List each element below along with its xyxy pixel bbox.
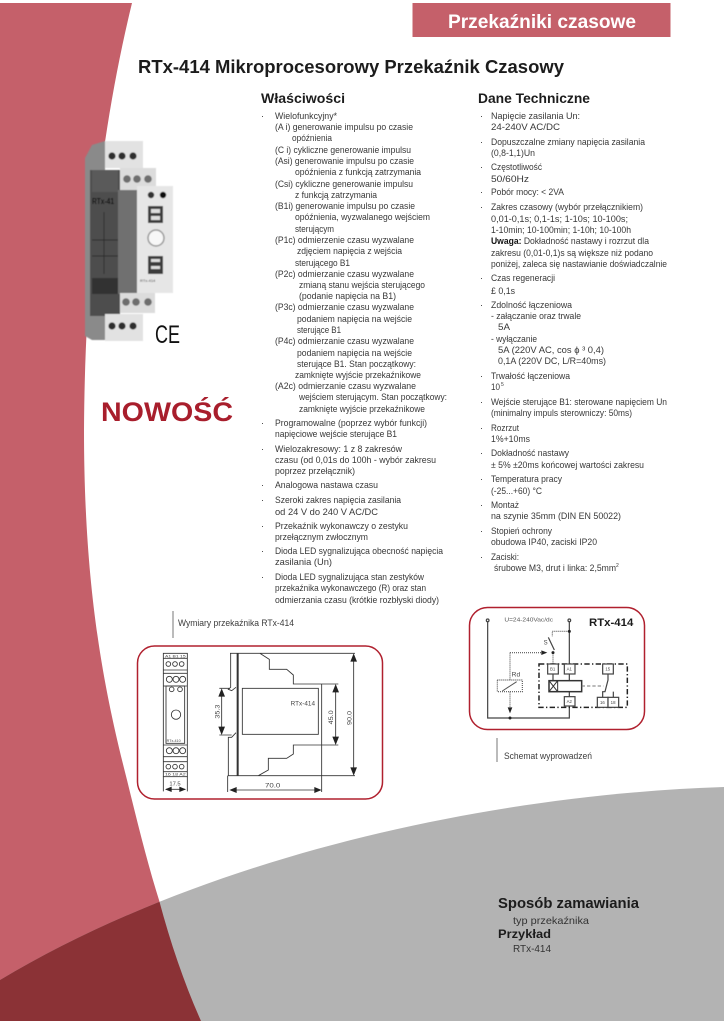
item: szeroki zakres: od 24 V do 240 V AC/DC <box>275 506 378 517</box>
spec: rozrzut: 1%+10ms <box>491 433 530 444</box>
item: wielozakresowy: czasu (od 0,01s do 100h - wybór zakresu <box>275 454 436 465</box>
item: analogowa nastawa: · <box>261 479 264 490</box>
spec: zdolność łączeniowa: 5A (220V AC, cos ϕ ³ 0,4) <box>498 344 604 355</box>
item: analogowa nastawa: Analogowa nastawa czasu <box>275 479 378 490</box>
spec: dokładność nastawy: ± 5% ±20ms końcowej wartości zakresu <box>491 459 644 470</box>
item: wielofunkcyjny: wejściem sterującym. Stan początkowy: <box>298 391 447 402</box>
side view drawing: 35.3 <box>214 704 221 719</box>
item: wielofunkcyjny: opóźnienia, wyzwalanego wejściem <box>295 211 430 222</box>
caption: schemat: Schemat wyprowadzeń <box>504 751 592 761</box>
item: przekaźnik wykonawczy <box>261 520 408 542</box>
spec: stopień ochrony: Stopień ochrony <box>491 525 552 536</box>
item: programowalne: napięciowe wejście sterujące B1 <box>275 428 397 439</box>
spec: zakres czasowy: · <box>480 201 483 212</box>
item: wielofunkcyjny: sterujące B1 <box>297 324 341 335</box>
item: wielozakresowy: · <box>261 443 264 454</box>
item: dioda LED stanu: Dioda LED sygnalizująca stan zestyków <box>275 571 424 582</box>
schematic label: model: RTx-414 <box>589 617 633 629</box>
front view drawing: RTx-410 <box>167 739 181 743</box>
item: dioda LED stanu: · <box>261 571 264 582</box>
spec: napięcie zasilania: 24-240V AC/DC <box>491 121 560 132</box>
item: dioda LED zasilania: · <box>261 545 264 556</box>
spec: rozrzut: · <box>480 422 483 433</box>
schematic terminals: A2 <box>567 699 573 704</box>
item: wielofunkcyjny: (C i) cykliczne generowanie impulsu <box>275 144 411 155</box>
spec: wejście sterujące: · <box>480 396 483 407</box>
side view drawing <box>214 653 357 793</box>
item: szeroki zakres <box>261 494 402 517</box>
item: wielofunkcyjny: (P4c) odmierzanie czasu wyzwalane <box>275 335 414 346</box>
spec: trwałość łączeniowa: 5 <box>501 382 504 388</box>
schematic label: voltage: U=24-240Vac/dc <box>504 618 553 624</box>
spec: zakres czasowy: Uwaga: Dokładność nastawy i rozrzut dla <box>491 235 650 246</box>
spec: zmiany napięcia: (0,8-1,1)Un <box>491 147 535 158</box>
device photo: RTx-414 <box>140 278 156 283</box>
background: gray curved area <box>0 787 724 1021</box>
item: wielofunkcyjny: sterujące B1. Stan początkowy: <box>297 358 416 369</box>
spec: zaciski: 2 <box>616 563 619 569</box>
item: dioda LED stanu: odmierzania czasu (krótkie rozbłyski diody) <box>275 594 439 605</box>
spec: zakres czasowy: poniżej, zaleca się nastawianie doświadczalnie <box>491 258 667 269</box>
item: wielofunkcyjny: zdjęciem napięcia z wejścia <box>297 245 403 256</box>
item: wielofunkcyjny: z funkcją zatrzymania <box>295 189 378 200</box>
spec: pobór mocy: Pobór mocy: < 2VA <box>491 186 565 197</box>
device photo <box>85 141 173 341</box>
spec: zaciski <box>480 551 619 573</box>
spec: częstotliwość: · <box>480 161 483 172</box>
spec: częstotliwość: 50/60Hz <box>491 173 529 184</box>
caption: wymiary <box>172 611 294 638</box>
spec: temperatura pracy: Temperatura pracy <box>491 473 562 484</box>
item: wielozakresowy: Wielozakresowy: 1 z 8 zakresów <box>275 443 402 454</box>
device photo: RTx-41 <box>92 197 114 206</box>
column: Właściwości list <box>261 110 447 605</box>
item: przekaźnik wykonawczy: Przekaźnik wykonawczy o zestyku <box>275 520 408 531</box>
item: wielofunkcyjny: · <box>261 110 264 121</box>
item: wielofunkcyjny: sterującym <box>295 223 334 234</box>
item: wielofunkcyjny: (Asi) generowanie impulsu po czasie <box>275 155 414 166</box>
spec: zdolność łączeniowa: - wyłączanie <box>491 333 537 344</box>
spec: czas regeneracji: · <box>480 272 483 283</box>
item: wielofunkcyjny: Wielofunkcyjny* <box>275 110 337 121</box>
spec: zakres czasowy: Zakres czasowy (wybór przełącznikiem) <box>491 201 643 212</box>
spec: czas regeneracji: £ 0,1s <box>491 285 515 296</box>
side view drawing: 90.0 <box>346 711 353 725</box>
item: wielofunkcyjny: (P3c) odmierzanie czasu wyzwalane <box>275 301 414 312</box>
spec: zdolność łączeniowa: 0,1A (220V DC, L/R=40ms) <box>498 355 606 366</box>
spec: trwałość łączeniowa: · <box>480 370 483 381</box>
item: wielofunkcyjny: sterującego B1 <box>295 257 350 268</box>
column: Dane Techniczne list <box>480 110 667 573</box>
item: wielofunkcyjny: zamknięte wyjście przekaźnikowe <box>295 369 421 380</box>
item: wielofunkcyjny: (P2c) odmierzanie czasu wyzwalane <box>275 268 414 279</box>
ordering info block: Sposób zamawiania <box>498 896 640 912</box>
item: wielofunkcyjny <box>261 110 447 414</box>
spec: napięcie zasilania: · <box>480 110 483 121</box>
spec: zdolność łączeniowa: · <box>480 299 483 310</box>
spec: stopień ochrony: · <box>480 525 483 536</box>
spec: zdolność łączeniowa: Zdolność łączeniowa <box>491 299 573 310</box>
item: szeroki zakres: Szeroki zakres napięcia zasilania <box>275 494 402 505</box>
spec: zmiany napięcia: Dopuszczalne zmiany napięcia zasilania <box>491 136 646 147</box>
ordering info block: typ przekaźnika <box>513 915 589 927</box>
spec: częstotliwość <box>480 161 542 184</box>
spec: montaż: · <box>480 499 483 510</box>
spec: czas regeneracji <box>480 272 555 296</box>
spec: dokładność nastawy: Dokładność nastawy <box>491 447 569 458</box>
panel: wiring schematic <box>470 608 644 730</box>
header banner <box>412 3 670 37</box>
spec: zmiany napięcia: · <box>480 136 483 147</box>
item: programowalne <box>261 417 427 439</box>
front view drawing <box>163 653 187 792</box>
schematic terminals: 18 <box>611 700 616 705</box>
item: wielofunkcyjny: podaniem napięcia na wejście <box>297 347 412 358</box>
spec: trwałość łączeniowa <box>480 370 571 392</box>
spec: pobór mocy: · <box>480 186 483 197</box>
spec: temperatura pracy: · <box>480 473 483 484</box>
spec: trwałość łączeniowa: Trwałość łączeniowa <box>491 370 571 381</box>
switch label: S <box>544 641 548 647</box>
schematic wiring <box>486 619 627 719</box>
side view drawing: RTx-414 <box>291 700 315 707</box>
ordering info block: Przykład <box>498 927 551 941</box>
item: wielofunkcyjny: podaniem napięcia na wejście <box>297 313 412 324</box>
spec: trwałość łączeniowa: 10 <box>491 381 500 392</box>
spec: temperatura pracy <box>480 473 562 496</box>
spec: napięcie zasilania: Napięcie zasilania Un: <box>491 110 580 121</box>
schematic terminals: A1 <box>567 667 573 672</box>
item: wielofunkcyjny: opóźnienia z funkcją zatrzymania <box>295 166 422 177</box>
spec: rozrzut <box>480 422 530 444</box>
item: dioda LED zasilania: Dioda LED sygnalizująca obecność napięcia <box>275 545 444 556</box>
item: dioda LED stanu: przekaźnika wykonawczego (R) oraz stan <box>275 582 426 593</box>
item: dioda LED zasilania <box>261 545 444 567</box>
spec: wejście sterujące <box>480 396 667 418</box>
spec: temperatura pracy: (-25...+60) °C <box>491 485 542 496</box>
NOWOŚĆ label: NOWOŚĆ <box>101 396 233 427</box>
spec: zaciski: · <box>480 551 483 562</box>
spec: zakres czasowy <box>480 201 667 269</box>
item: dioda LED stanu <box>261 571 439 605</box>
title: RTx-414 Mikroprocesorowy Przekaźnik Czasowy <box>138 56 565 77</box>
caption: schemat <box>496 738 592 762</box>
item: dioda LED zasilania: zasilania (Un) <box>275 556 332 567</box>
spec: częstotliwość: Częstotliwość <box>491 161 542 172</box>
spec: zdolność łączeniowa <box>480 299 606 366</box>
item: wielozakresowy: poprzez przełącznik) <box>275 465 355 476</box>
item: wielofunkcyjny: (A2c) odmierzanie czasu wyzwalane <box>275 380 416 391</box>
item: wielozakresowy <box>261 443 436 476</box>
item: wielofunkcyjny: zmianą stanu wejścia sterującego <box>299 279 425 290</box>
spec: napięcie zasilania <box>480 110 580 132</box>
spec: rozrzut: Rozrzut <box>491 422 519 433</box>
item: wielofunkcyjny: (A i) generowanie impulsu po czasie <box>275 121 413 132</box>
front view drawing: A1 B1 15 <box>165 653 187 658</box>
spec: zdolność łączeniowa: - załączanie oraz trwale <box>491 310 581 321</box>
spec: zaciski: śrubowe M3, drut i linka: 2,5mm <box>494 562 616 573</box>
spec: stopień ochrony: obudowa IP40, zaciski IP20 <box>491 536 597 547</box>
load Rd: Rd <box>512 671 520 678</box>
spec: montaż <box>480 499 621 521</box>
heading: Dane Techniczne: Dane Techniczne <box>478 90 590 106</box>
schematic terminals: B1 <box>550 667 556 672</box>
CE mark: CE <box>155 321 180 349</box>
spec: montaż: Montaż <box>491 499 519 510</box>
load Rd <box>497 671 522 692</box>
item: programowalne: Programowalne (poprzez wybór funkcji) <box>275 417 427 428</box>
front view drawing: 16 18 A2 <box>165 771 187 776</box>
relay coil <box>549 681 603 692</box>
spec: zmiany napięcia <box>480 136 646 158</box>
item: szeroki zakres: · <box>261 494 264 505</box>
front view drawing: 17.5 <box>169 781 181 787</box>
spec: dokładność nastawy: · <box>480 447 483 458</box>
item: wielofunkcyjny: zamknięte wyjście przekaźnikowe <box>299 403 425 414</box>
item: przekaźnik wykonawczy: · <box>261 520 264 531</box>
header banner: Przekaźniki czasowe <box>448 11 636 33</box>
panel: dimension drawing <box>138 646 382 799</box>
spec: zaciski: Zaciski: <box>491 551 519 562</box>
heading: Właściwości: Właściwości <box>261 90 345 106</box>
side view drawing: 70.0 <box>265 783 281 790</box>
spec: zakres czasowy: 1-10min; 10-100min; 1-10h; 10-100h <box>491 224 631 235</box>
schematic terminals <box>548 664 619 707</box>
ordering info block <box>498 896 640 955</box>
spec: stopień ochrony <box>480 525 597 547</box>
background: dark red overlap <box>0 902 201 1021</box>
spec: wejście sterujące: (minimalny impuls sterowniczy: 50ms) <box>491 407 632 418</box>
spec: zakres czasowy: 0,01-0,1s; 0,1-1s; 1-10s; 10-100s; <box>491 213 628 224</box>
item: programowalne: · <box>261 417 264 428</box>
item: wielofunkcyjny: (Csi) cykliczne generowanie impulsu <box>275 178 413 189</box>
background: red curved band <box>0 3 201 1021</box>
spec: czas regeneracji: Czas regeneracji <box>491 272 555 283</box>
schematic terminals: 16 <box>600 700 605 705</box>
spec: montaż: na szynie 35mm (DIN EN 50022) <box>491 510 621 521</box>
spec: zakres czasowy: zakresu (0,01-0,1)s są większe niż podano <box>491 247 653 258</box>
item: wielofunkcyjny: opóźnienia <box>292 132 333 143</box>
spec: zdolność łączeniowa: 5A <box>498 321 511 332</box>
item: wielofunkcyjny: (B1i) generowanie impulsu po czasie <box>275 200 415 211</box>
schematic terminals: 15 <box>605 667 611 672</box>
caption: wymiary: Wymiary przekaźnika RTx-414 <box>178 618 294 628</box>
side view drawing: 45.0 <box>328 710 335 724</box>
item: wielofunkcyjny: (podanie napięcia na B1) <box>299 290 396 301</box>
spec: wejście sterujące: Wejście sterujące B1: sterowane napięciem Un <box>491 396 667 407</box>
ordering info block: RTx-414 <box>513 943 551 955</box>
item: przekaźnik wykonawczy: przełącznym zwłocznym <box>275 531 368 542</box>
spec: dokładność nastawy <box>480 447 644 470</box>
item: wielofunkcyjny: (P1c) odmierzenie czasu wyzwalane <box>275 234 414 245</box>
